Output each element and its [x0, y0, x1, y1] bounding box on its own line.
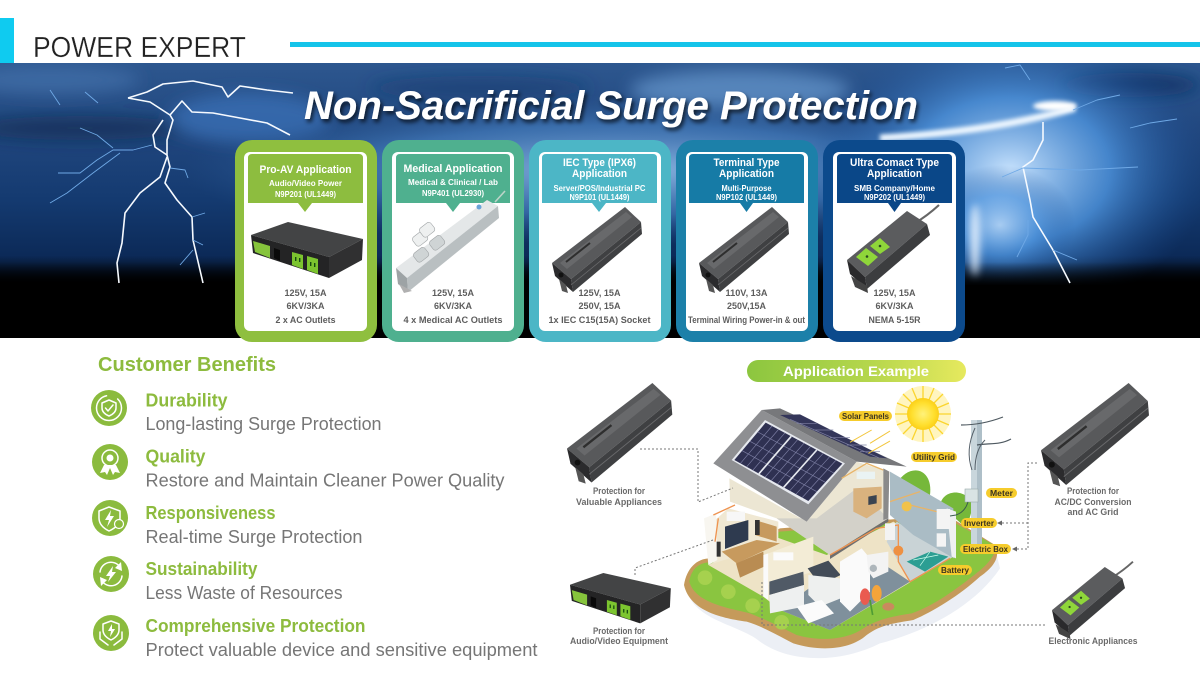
card 4 specifications: Terminal Wiring Power-in & out [688, 315, 806, 326]
benefit: responsiveness [92, 500, 362, 547]
benefit: quality [92, 444, 504, 490]
card 5 specifications [868, 288, 921, 326]
card 5 heading line 2: Application [867, 168, 922, 180]
benefit: comprehensive protection: Protect valuable device and sensitive equipment [146, 640, 538, 660]
product: electronic appliances: Electronic Appliances [1048, 636, 1138, 646]
product: electronic appliances [1048, 562, 1138, 646]
card 2 specifications: 6KV/3KA [434, 301, 472, 312]
utility pole and meter [950, 417, 1011, 545]
illustration: solar house on island [684, 408, 1000, 658]
product: protection for audio video equipment [570, 573, 671, 646]
benefit: comprehensive protection: Comprehensive Protection [146, 616, 366, 636]
card 1 heading: Pro-AV Application [260, 164, 352, 176]
connector: audio video to house [635, 540, 713, 575]
benefit: responsiveness: Responsiveness [146, 503, 276, 523]
card 4 heading: Terminal Type [714, 157, 780, 169]
card 2 specifications: 125V, 15A [432, 288, 474, 299]
card 2 heading: Medical Application [404, 163, 503, 175]
icon: sun [895, 386, 951, 442]
card 4 model: N9P102 (UL1449) [716, 192, 777, 202]
panel: Ultra Compact Type Application [823, 140, 965, 342]
header: accent block and title [0, 18, 1200, 64]
panel: Pro-AV Application [235, 140, 377, 342]
product: protection for valuable appliances [567, 383, 672, 507]
card 3 specifications: 125V, 15A [578, 288, 621, 299]
product: protection for audio video equipment: Protection for [593, 626, 645, 636]
connector: electronic appliances to house [762, 582, 1045, 625]
card 5 product [847, 205, 939, 293]
card 5 subheading: SMB Company/Home [854, 183, 935, 193]
banner: storm sky with lightning [0, 63, 1200, 338]
product: protection for AC/DC conversion and AC grid: AC/DC Conversion [1054, 497, 1132, 507]
panel: IEC Type Application [529, 140, 671, 342]
benefit: quality: Restore and Maintain Cleaner Power Quality [146, 470, 504, 490]
connector: grid protection to inverter and electric box [997, 463, 1037, 552]
card 1 specifications: 2 x AC Outlets [276, 315, 336, 326]
benefit: sustainability: Sustainability [146, 559, 258, 579]
card 3 specifications: 250V, 15A [578, 301, 621, 312]
label: electric box: Electric Box [963, 544, 1008, 554]
product: protection for AC/DC conversion and AC grid [1041, 383, 1149, 517]
card 1 specifications: 125V, 15A [284, 288, 327, 299]
badge: application example: Application Example [783, 364, 930, 379]
card 4 heading line 2: Application [719, 168, 774, 180]
panel: customer benefits [91, 354, 538, 660]
card 3 heading line 2: Application [572, 168, 627, 180]
card 1 product [251, 222, 363, 278]
card 2 specifications [404, 288, 502, 326]
panel: Terminal Type Application [676, 140, 818, 342]
product: protection for valuable appliances: Valuable Appliances [576, 497, 662, 507]
card 2 product: medical outlet strip [396, 191, 505, 293]
benefit: sustainability: Less Waste of Resources [146, 583, 342, 603]
card 4 specifications: 250V,15A [727, 301, 766, 312]
card 5 specifications: NEMA 5-15R [868, 315, 921, 326]
label: utility grid: Utility Grid [913, 452, 955, 462]
product: protection for valuable appliances: Protection for [593, 486, 645, 496]
card 2 subheading: Medical & Clinical / Lab [408, 177, 498, 187]
label: battery: Battery [941, 565, 969, 575]
card 3 product [552, 207, 642, 293]
card 1 specifications: 6KV/3KA [286, 301, 325, 312]
benefit: comprehensive protection [93, 615, 538, 660]
product: protection for AC/DC conversion and AC grid: Protection for [1067, 486, 1119, 496]
header: accent block and title: POWER EXPERT [33, 32, 246, 64]
card 4 specifications: 110V, 13A [726, 288, 768, 299]
label: inverter: Inverter [964, 518, 995, 528]
card 3 model: N9P101 (UL1449) [570, 192, 630, 202]
benefit: responsiveness: Real-time Surge Protection [146, 527, 362, 547]
card 4 specifications [688, 288, 806, 326]
card 2 model: N9P401 (UL2930) [422, 188, 484, 198]
card 3 subheading: Server/POS/Industrial PC [554, 183, 646, 193]
card 4 subheading: Multi-Purpose [722, 183, 772, 193]
card 1 subheading: Audio/Video Power [269, 178, 343, 188]
card 3 specifications: 1x IEC C15(15A) Socket [548, 315, 651, 326]
label: meter: Meter [990, 488, 1014, 498]
connector: valuable appliances to house [640, 449, 733, 502]
card 5 specifications: 6KV/3KA [876, 301, 914, 312]
card 3 heading: IEC Type (IPX6) [563, 157, 636, 169]
card 1 specifications [276, 288, 336, 326]
badge: application example [747, 360, 966, 382]
card 3 specifications [548, 288, 651, 326]
benefit: sustainability [93, 556, 342, 603]
benefit: durability: Long-lasting Surge Protection [146, 414, 382, 434]
benefit: durability [91, 390, 382, 434]
card 4 product [699, 207, 789, 293]
product: protection for AC/DC conversion and AC grid: and AC Grid [1068, 507, 1118, 517]
card 1 model: N9P201 (UL1449) [275, 189, 336, 199]
label: solar panels: Solar Panels [842, 411, 889, 421]
benefit: quality: Quality [146, 446, 206, 466]
card 5 specifications: 125V, 15A [874, 288, 916, 299]
card 5 heading: Ultra Comact Type [850, 157, 939, 169]
card 2 specifications: 4 x Medical AC Outlets [404, 315, 502, 326]
main title: Non-Sacrificial Surge Protection [304, 84, 918, 128]
product: protection for audio video equipment: Audio/Video Equipment [570, 636, 668, 646]
benefit: durability: Durability [146, 390, 228, 410]
heading: customer benefits: Customer Benefits [98, 354, 276, 376]
panel: Medical Application [382, 140, 524, 342]
card 5 model: N9P202 (UL1449) [864, 192, 925, 202]
